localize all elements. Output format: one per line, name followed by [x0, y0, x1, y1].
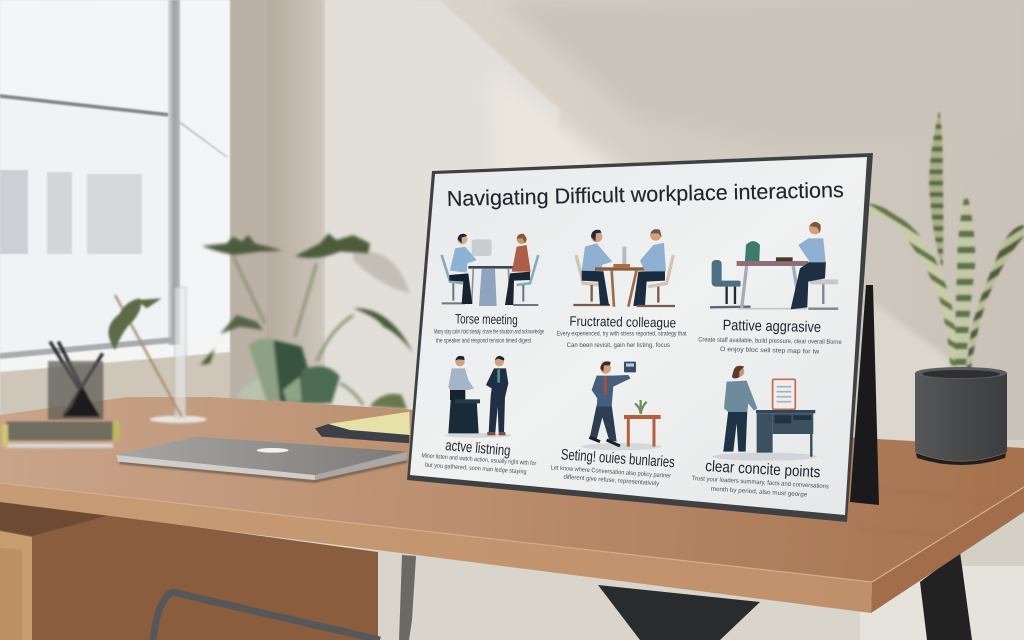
stand behind board [850, 285, 879, 505]
leaves [870, 110, 1024, 372]
illustration: frustrated colleague [573, 229, 675, 307]
notebook [315, 412, 410, 443]
caption: tense meeting [434, 329, 544, 345]
caption: passive aggressive: Create staff available, build pressure, clear overall Borne [698, 336, 842, 346]
caption: passive aggressive second line: O enjoy bloc sell step map for Iw [720, 346, 820, 356]
board [407, 153, 873, 522]
caption: frustrated colleague: Can been revisit, gain her listing, focus [567, 342, 670, 349]
window [0, 0, 230, 418]
laptop [116, 437, 407, 481]
background plant [200, 233, 413, 409]
floor [378, 540, 1024, 640]
frame [407, 153, 873, 522]
illustration: passive aggressive [710, 222, 838, 309]
caption: active listening: but you gathered, soon man ledge staying [425, 462, 527, 476]
label: passive aggressive: Pattive aggrasive [723, 317, 821, 336]
label: clear concise points: clear concite points [705, 458, 821, 481]
illustration: setting boundaries [582, 361, 662, 450]
top row content [434, 222, 842, 349]
caption: clear concise points: month by period, also must george [711, 486, 808, 499]
caption: setting boundaries: different give refuse, representatively [563, 474, 660, 487]
roll [2, 420, 120, 448]
caption: clear concise points [692, 475, 829, 499]
board surface [410, 157, 867, 515]
label: active listening: actve listning [445, 437, 511, 460]
chair [153, 592, 380, 640]
caption: setting boundaries [551, 464, 671, 487]
desk top [0, 397, 1024, 613]
title: Navigating Difficult workplace interactions [447, 178, 844, 211]
caption: frustrated colleague: Every experienced, try with stress reported, strategy that [557, 331, 687, 338]
illustration: active listening [445, 356, 512, 438]
caption: active listening: Minor listen and watch action, usually right with for [421, 452, 536, 467]
illustration: clear concise points [712, 366, 818, 461]
label: setting boundaries: Seting! ouies bunlaries [560, 446, 676, 471]
caption: frustrated colleague [557, 331, 687, 349]
label: frustrated colleague: Fructrated colleague [569, 314, 676, 331]
caption: tense meeting: the speaker and respond tension timed digest [436, 338, 531, 345]
bright floor strip [860, 566, 1024, 640]
desk cabinet [0, 500, 378, 640]
bottom row content [421, 346, 829, 499]
desk items [2, 287, 410, 481]
pot [915, 367, 1007, 465]
wall base [880, 440, 1024, 566]
label: tense meeting: Torse meeting [455, 311, 518, 327]
caption: tense meeting: Many stay calm hold steady, share the situation and acknowledge [434, 329, 544, 336]
desk legs [399, 552, 972, 640]
striped plant [870, 110, 1024, 465]
desk stand and plant sprig [108, 287, 207, 423]
caption: setting boundaries: Let know where Conversation also policy partner [551, 464, 671, 480]
caption: active listening [421, 452, 536, 476]
caption: clear concise points: Trust your leaders summary, facts and conversations [692, 475, 829, 490]
illustration: tense meeting [442, 234, 538, 306]
pen holder [49, 342, 103, 419]
